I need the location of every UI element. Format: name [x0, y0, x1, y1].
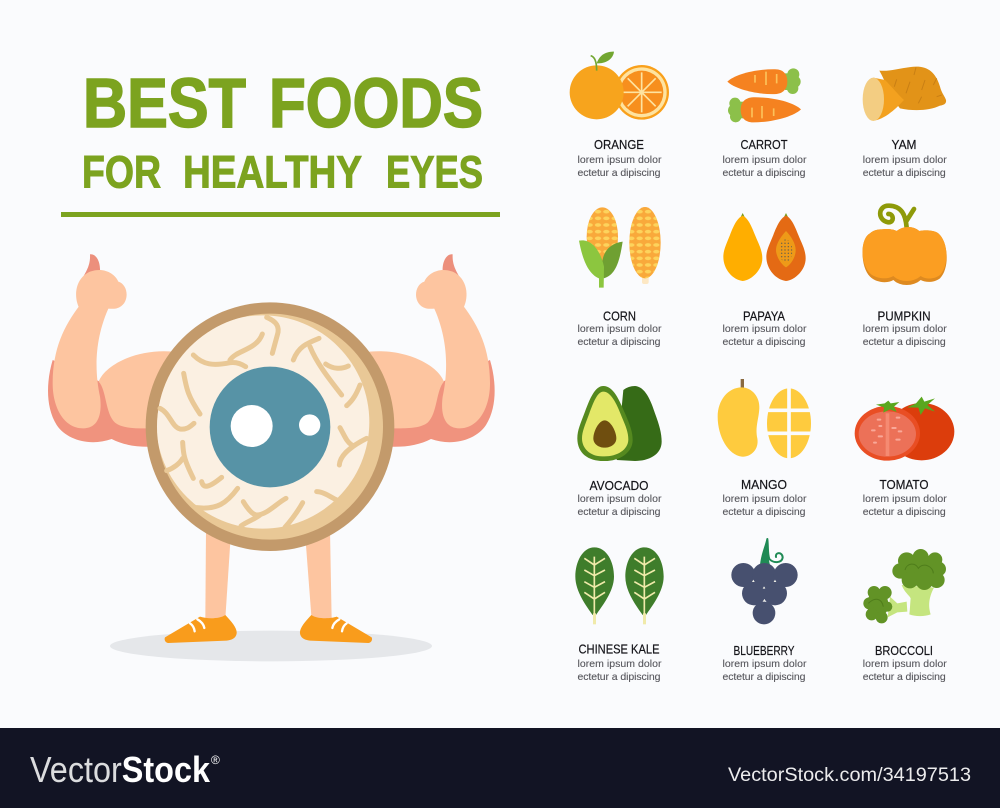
left leg: [205, 530, 231, 618]
description: blueberry: lorem ipsum dolor: [722, 658, 807, 670]
ground shadow: [110, 631, 432, 661]
name: avocado: AVOCADO: [590, 478, 648, 493]
description: broccoli: ectetur a dipiscing: [863, 671, 946, 683]
food: broccoli: [863, 549, 947, 683]
description: broccoli: lorem ipsum dolor: [863, 658, 947, 670]
name: broccoli: BROCCOLI: [875, 643, 933, 658]
icon: blueberry: [731, 539, 798, 624]
description: avocado: [578, 493, 662, 518]
description: yam: ectetur a dipiscing: [863, 167, 946, 179]
name: yam: YAM: [892, 137, 916, 152]
right arm: [369, 254, 495, 447]
small highlight: [299, 414, 320, 436]
description: mango: [722, 493, 807, 518]
food: yam: [863, 67, 947, 179]
title line 2: [82, 146, 483, 198]
description: blueberry: ectetur a dipiscing: [722, 671, 806, 683]
icon: yam: [863, 67, 946, 121]
food: chinese kale: [575, 547, 664, 683]
description: corn: lorem ipsum dolor: [578, 323, 662, 335]
description: carrot: ectetur a dipiscing: [722, 167, 806, 179]
name: carrot: CARROT: [740, 137, 788, 152]
icon: tomato: [855, 397, 954, 461]
title line 1: BEST: [83, 64, 246, 142]
description: pumpkin: [863, 323, 947, 348]
description: yam: [863, 154, 947, 179]
icon: avocado: [577, 386, 662, 461]
description: blueberry: [722, 658, 807, 683]
icon: orange: [570, 52, 669, 120]
icon: pumpkin: [862, 206, 947, 285]
icon: corn: [579, 207, 661, 288]
right leg: [305, 530, 332, 620]
description: mango: lorem ipsum dolor: [722, 493, 807, 505]
description: broccoli: [863, 658, 947, 683]
title line 2: HEALTHY: [183, 146, 362, 198]
description: avocado: ectetur a dipiscing: [578, 506, 661, 518]
food: blueberry: [722, 539, 807, 683]
food: orange: [570, 52, 669, 179]
food: tomato: [855, 397, 954, 518]
name: mango: MANGO: [741, 477, 787, 492]
description: orange: [578, 154, 662, 179]
description: corn: [578, 323, 662, 348]
name: pumpkin: PUMPKIN: [878, 308, 930, 324]
description: carrot: [722, 154, 807, 179]
title: [82, 64, 483, 198]
description: tomato: lorem ipsum dolor: [863, 493, 947, 505]
description: yam: lorem ipsum dolor: [863, 154, 947, 166]
description: pumpkin: lorem ipsum dolor: [863, 323, 947, 335]
title line 1: [83, 64, 483, 142]
description: carrot: lorem ipsum dolor: [722, 154, 807, 166]
left shoe: [165, 615, 237, 643]
description: orange: ectetur a dipiscing: [578, 167, 661, 179]
name: papaya: PAPAYA: [743, 308, 785, 324]
description: papaya: [722, 323, 807, 348]
footer image id: VectorStock.com/34197513: [728, 765, 971, 786]
food: pumpkin: [862, 206, 947, 348]
title line 2: FOR: [82, 146, 161, 198]
right shoe: [300, 615, 372, 643]
icon: papaya: [723, 213, 806, 281]
icon: chinese kale: [575, 547, 664, 624]
food: papaya: [722, 213, 807, 348]
icon: broccoli: [863, 549, 946, 623]
left arm: [48, 254, 173, 447]
description: chinese kale: ectetur a dipiscing: [578, 671, 661, 683]
title line 1: FOODS: [269, 64, 483, 142]
eyeball: [146, 302, 394, 551]
description: papaya: ectetur a dipiscing: [722, 336, 806, 348]
description: papaya: lorem ipsum dolor: [722, 323, 807, 335]
food: carrot: [722, 68, 807, 179]
icon: mango: [718, 379, 813, 460]
footer logo: VectorStock: [30, 749, 211, 790]
name: corn: CORN: [603, 308, 636, 324]
description: orange: lorem ipsum dolor: [578, 154, 662, 166]
food: corn: [578, 207, 662, 348]
illustration: strong eyeball character: [48, 254, 495, 661]
veins: [160, 317, 367, 527]
description: mango: ectetur a dipiscing: [722, 506, 806, 518]
panel: food grid: [570, 52, 954, 683]
icon: carrot: [727, 68, 801, 122]
footer bar: [0, 728, 1000, 808]
name: tomato: TOMATO: [880, 477, 928, 492]
description: corn: ectetur a dipiscing: [578, 336, 661, 348]
name: chinese kale: CHINESE KALE: [578, 642, 660, 657]
name: blueberry: BLUEBERRY: [734, 643, 795, 658]
name: orange: ORANGE: [594, 137, 644, 152]
large highlight: [231, 405, 273, 447]
iris: [210, 367, 330, 487]
title line 2: EYES: [386, 146, 483, 198]
description: pumpkin: ectetur a dipiscing: [863, 336, 946, 348]
description: chinese kale: [578, 658, 662, 683]
description: tomato: ectetur a dipiscing: [863, 506, 946, 518]
description: tomato: [863, 493, 947, 518]
registered mark: ®: [211, 753, 220, 767]
description: avocado: lorem ipsum dolor: [578, 493, 662, 505]
food: avocado: [577, 386, 662, 518]
food: mango: [718, 379, 813, 518]
description: chinese kale: lorem ipsum dolor: [578, 658, 662, 670]
